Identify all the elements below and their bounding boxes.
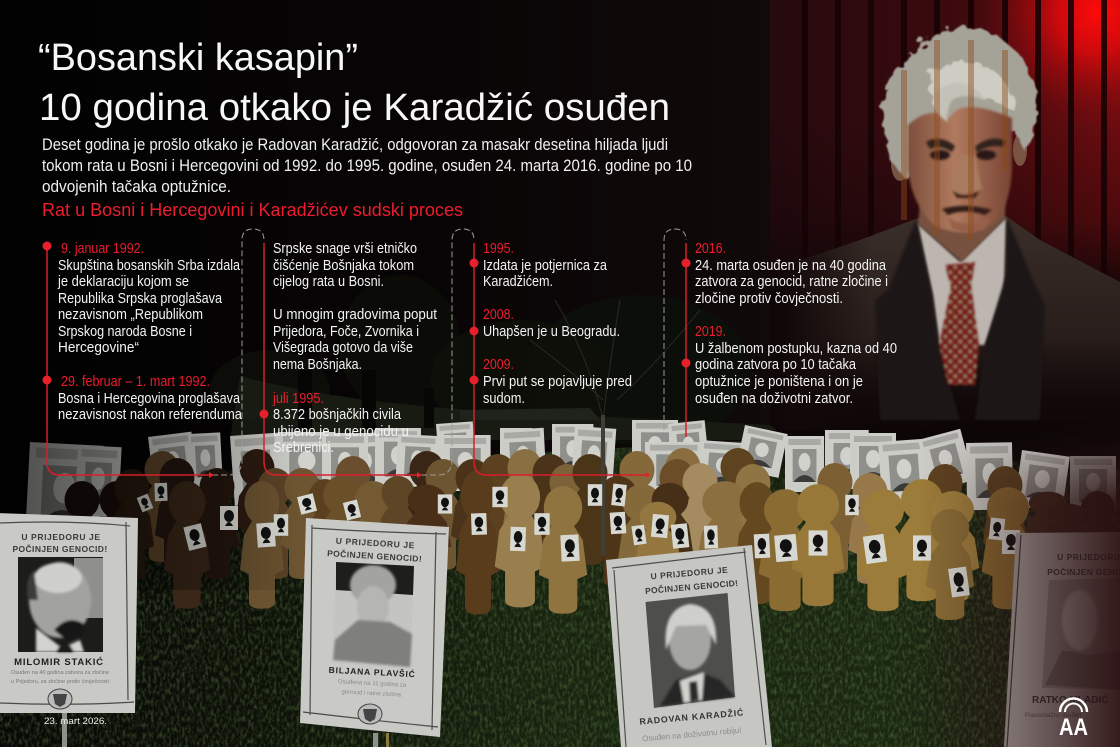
curtain bars — [802, 0, 1107, 280]
timeline column 4: 2016-2019: U žalbenom postupku, kazna od 40 — [695, 341, 897, 357]
bars over face — [901, 40, 1008, 240]
timeline column 1: 1992 — [57, 241, 243, 423]
back row of posters — [25, 420, 1116, 541]
timeline column 2: war and Srebrenica — [272, 241, 437, 456]
timeline column 3: 1995-2009 — [483, 241, 632, 407]
background: dim park with trees — [210, 275, 790, 445]
intro text: tokom rata u Bosni i Hercegovini od 1992. do 1995. godine, osuđen 24. marta 2016. godine po 10 — [42, 157, 692, 175]
timeline column 2: war and Srebrenica: ubijeno je u genocidu u — [273, 424, 409, 440]
timeline column 1: 1992: je deklaraciju kojom se — [57, 274, 189, 290]
poster: Milomir Stakić — [0, 513, 138, 713]
poster: Biljana Plavšić: U PRIJEDORU JE — [336, 536, 415, 550]
tie — [939, 262, 979, 385]
poster: Milomir Stakić: u Prijedoru, za zločine protiv čovječnosti — [11, 679, 109, 685]
timeline column 2: war and Srebrenica: Prijedora, Foče, Zvornika i — [273, 324, 419, 340]
hair curl on forehead — [934, 83, 985, 122]
timeline column 2: war and Srebrenica: juli 1995. — [272, 391, 324, 407]
poster stakes — [62, 713, 389, 747]
timeline column 1: 1992: Skupština bosanskih Srba izdala — [58, 258, 241, 274]
date: 23. mart 2026. — [44, 716, 107, 727]
shirt collar — [918, 218, 1006, 345]
poster: Radovan Karadžić: Osuđen na doživotnu robiju! — [642, 726, 742, 743]
timeline column 1: 1992: Srpskog naroda Bosne i — [58, 324, 192, 340]
intro text — [42, 136, 692, 196]
paper child name tags — [137, 483, 1020, 598]
timeline column 1: 1992: Hercegovine“ — [58, 340, 139, 356]
face — [908, 107, 1012, 232]
timeline column 1: 1992: Republika Srpska proglašava — [58, 291, 223, 307]
title — [38, 37, 670, 129]
right side fade — [930, 439, 1120, 747]
grass field — [0, 430, 1120, 747]
timeline column 2: war and Srebrenica: 8.372 bošnjačkih civila — [273, 407, 402, 423]
timeline column 4: 2016-2019: 2016. — [695, 241, 726, 257]
timeline column 3: 1995-2009: 2009. — [483, 357, 514, 373]
hair — [880, 26, 1038, 182]
poster: Biljana Plavšić: POČINJEN GENOCID! — [327, 547, 422, 564]
title: 10 godina otkako je Karadžić osuđen — [39, 87, 670, 129]
timeline column 3: 1995-2009: sudom. — [483, 391, 525, 407]
poster: Milomir Stakić: Osuđen na 40 godina zatvora za zločine — [11, 670, 109, 676]
left darkening over back rows — [0, 420, 300, 590]
timeline column 3: 1995-2009: 1995. — [483, 241, 514, 257]
ears — [891, 145, 909, 181]
timeline column 1: 1992: 29. februar – 1. mart 1992. — [61, 374, 210, 390]
timeline heading: Rat u Bosni i Hercegovini i Karadžićev sudski proces — [42, 200, 463, 220]
poster: Radovan Karadžić — [606, 545, 772, 747]
hair highlights — [930, 63, 1016, 120]
suit — [790, 216, 1120, 440]
poster: Ratko Mladić: Pravosnažno osuđen — [1025, 713, 1081, 719]
title: “Bosanski kasapin” — [38, 37, 358, 79]
timeline column 4: 2016-2019: optužnice je poništena i on je — [695, 374, 863, 390]
poster: Radovan Karadžić: POČINJEN GENOCID! — [645, 577, 739, 596]
intro text: odvojenih tačaka optužnice. — [42, 178, 231, 196]
timeline column 1: 1992: nezavisnost nakon referenduma — [58, 407, 243, 423]
timeline column 2: war and Srebrenica: čišćenje Bošnjaka tokom — [273, 258, 414, 274]
arrowheads — [209, 472, 649, 478]
timeline column 2: war and Srebrenica: U mnogim gradovima poput — [273, 307, 437, 323]
paper child silhouettes: back row — [60, 448, 1120, 602]
timeline column 2: war and Srebrenica: cijelog rata u Bosni. — [273, 274, 384, 290]
timeline column 3: 1995-2009: Izdata je potjernica za — [483, 258, 608, 274]
timeline dots — [42, 242, 690, 418]
timeline column 4: 2016-2019: zločine protiv čovječnosti. — [695, 291, 843, 307]
icon: AA agency logo — [1059, 698, 1088, 741]
timeline column 1: 1992: 9. januar 1992. — [61, 241, 144, 257]
suit fade left — [785, 236, 870, 440]
timeline column 3: 1995-2009: Karadžićem. — [483, 274, 553, 290]
neck — [918, 195, 1005, 262]
portrait of Radovan Karadžić — [785, 0, 1120, 440]
timeline column 2: war and Srebrenica: Srpske snage vrši etničko — [273, 241, 417, 257]
timeline column 3: 1995-2009: Prvi put se pojavljuje pred — [483, 374, 632, 390]
red path segments — [47, 243, 686, 475]
timeline column 2: war and Srebrenica: Višegrada gotovo da više — [273, 340, 413, 356]
timeline column 3: 1995-2009: Uhapšen je u Beogradu. — [483, 324, 620, 340]
timeline column 2: war and Srebrenica: nema Bošnjaka. — [273, 357, 362, 373]
timeline column 4: 2016-2019: 24. marta osuđen je na 40 godina — [695, 258, 887, 274]
timeline column 1: 1992: Bosna i Hercegovina proglašava — [58, 391, 241, 407]
timeline column 4: 2016-2019 — [695, 241, 897, 407]
icon: AA agency logo: AA — [1059, 714, 1088, 741]
brows, eyes, nose, mouth — [926, 139, 1006, 232]
intro text: Deset godina je prošlo otkako je Radovan Karadžić, odgovoran za masakr desetina hiljada ljudi — [42, 136, 668, 154]
poster: Milomir Stakić: MILOMIR STAKIĆ — [14, 656, 104, 668]
timeline column 1: 1992: nezavisnom „Republikom — [58, 307, 203, 323]
timeline column 4: 2016-2019: osuđen na doživotni zatvor. — [695, 391, 853, 407]
timeline connector — [47, 229, 686, 478]
timeline column 3: 1995-2009: 2008. — [483, 307, 514, 323]
poster: Biljana Plavšić — [300, 518, 449, 737]
timeline column 4: 2016-2019: zatvora za genocid, ratne zločine i — [695, 274, 888, 290]
tree trunk — [601, 415, 605, 555]
poster: Radovan Karadžić: RADOVAN KARADŽIĆ — [639, 706, 744, 727]
timeline column 4: 2016-2019: 2019. — [695, 324, 726, 340]
poster: Milomir Stakić: POČINJEN GENOCID! — [12, 543, 108, 554]
lapels — [875, 220, 960, 420]
poster: Ratko Mladić — [1004, 532, 1120, 747]
poster: Milomir Stakić: U PRIJEDORU JE — [21, 532, 101, 542]
background: red curtain panel — [770, 0, 1120, 460]
poster: Biljana Plavšić: Osuđena na 11 godina za — [338, 679, 407, 689]
paper child silhouettes: front row — [110, 469, 1091, 620]
poster: Ratko Mladić: RATKO MLADIĆ — [1032, 693, 1108, 706]
timeline column 2: war and Srebrenica: Srebrenici. — [273, 440, 334, 456]
timeline column 4: 2016-2019: godina zatvora po 10 tačaka — [695, 357, 857, 373]
dashed return segments — [212, 229, 686, 475]
poster: Biljana Plavšić: BILJANA PLAVŠIĆ — [328, 664, 416, 679]
poster: Radovan Karadžić: U PRIJEDORU JE — [650, 565, 729, 581]
poster: Biljana Plavšić: genocid i ratne zločine. — [341, 689, 403, 699]
